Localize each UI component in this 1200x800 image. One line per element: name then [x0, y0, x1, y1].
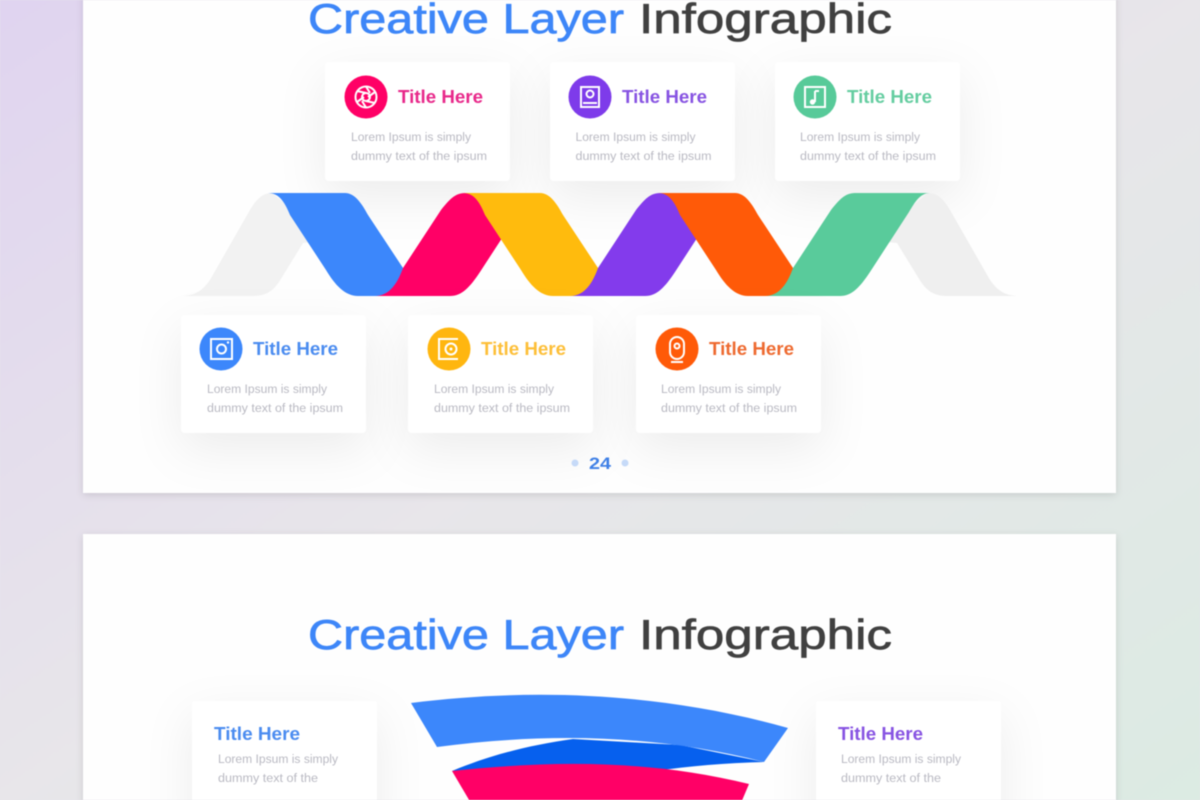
- card: blue: Title Here: [253, 339, 338, 359]
- panel: top slide: [83, 0, 1116, 493]
- title: top slide: [308, 0, 892, 42]
- card: orange: [636, 315, 821, 433]
- card: pink: [325, 62, 510, 181]
- card: right: Lorem Ipsum is simply: [841, 754, 961, 766]
- card: orange: Title Here: [709, 339, 794, 359]
- icon: aperture: [344, 76, 388, 118]
- card: left: [192, 701, 377, 800]
- card: orange: Lorem Ipsum is simply: [661, 384, 781, 396]
- card: yellow: Lorem Ipsum is simply: [434, 384, 554, 396]
- icon: camera: [200, 328, 242, 370]
- page number: 24: [589, 454, 612, 473]
- funnel chart: [411, 695, 788, 800]
- card: purple: Lorem Ipsum is simply: [576, 132, 696, 144]
- ribbon chart: [180, 193, 1020, 296]
- card: left: Title Here: [214, 724, 300, 744]
- card: green: [775, 62, 960, 181]
- icon: music: [794, 76, 836, 118]
- card: purple: [550, 62, 735, 181]
- card: left: Lorem Ipsum is simply: [218, 754, 338, 766]
- card: orange: dummy text of the ipsum: [661, 403, 797, 415]
- card: blue: Lorem Ipsum is simply: [207, 384, 327, 396]
- card: green: Title Here: [847, 87, 932, 107]
- card: right: dummy text of the: [841, 773, 941, 785]
- title: bottom slide: [308, 611, 892, 658]
- card: green: dummy text of the ipsum: [800, 151, 936, 163]
- title: bottom slide: Creative Layer: [308, 611, 624, 658]
- card: yellow: Title Here: [481, 339, 566, 359]
- card: yellow: dummy text of the ipsum: [434, 403, 570, 415]
- card: yellow: [408, 315, 593, 433]
- card: right: [816, 701, 1001, 800]
- card: green: Lorem Ipsum is simply: [800, 132, 920, 144]
- card: purple: dummy text of the ipsum: [576, 151, 712, 163]
- page number: [572, 454, 628, 473]
- title: bottom slide: Infographic: [639, 611, 892, 658]
- panel: bottom slide: [83, 534, 1116, 800]
- card: pink: Lorem Ipsum is simply: [351, 132, 471, 144]
- card: right: Title Here: [838, 724, 923, 744]
- icon: washer camera: [428, 328, 470, 370]
- icon: webcam: [656, 328, 698, 370]
- card: purple: Title Here: [622, 87, 707, 107]
- card: blue: [181, 315, 366, 433]
- card: pink: Title Here: [398, 87, 483, 107]
- icon: instant photo: [568, 76, 612, 118]
- card: pink: dummy text of the ipsum: [351, 151, 487, 163]
- card: blue: dummy text of the ipsum: [207, 403, 343, 415]
- card: left: dummy text of the: [218, 773, 318, 785]
